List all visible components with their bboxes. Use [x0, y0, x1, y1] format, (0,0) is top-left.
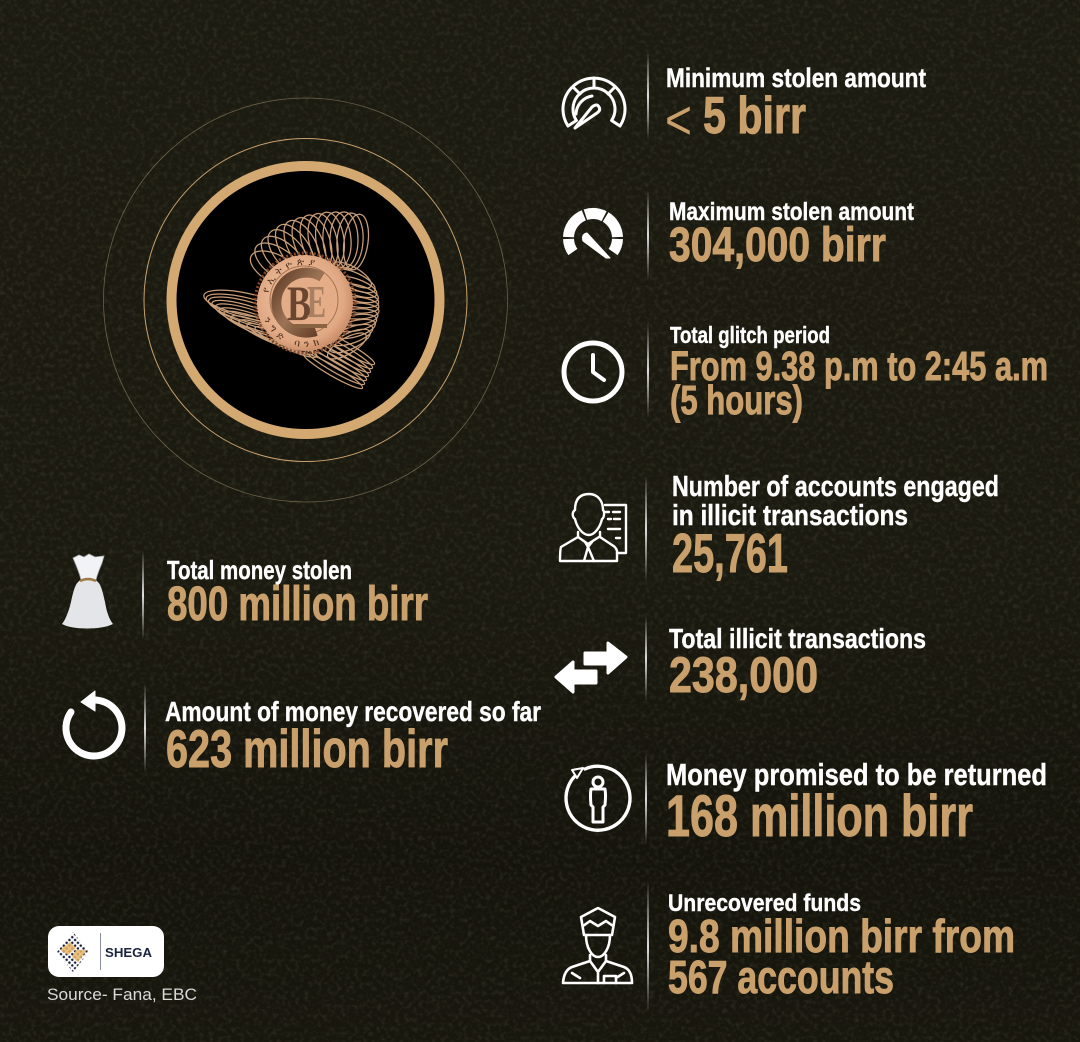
- Shega logo badge: SHEGA: [105, 945, 153, 960]
- value: 168 million birr: [666, 784, 973, 849]
- label: Total money stolen: [167, 555, 352, 585]
- stat: minimum stolen amount: [563, 52, 926, 151]
- value line 2: (5 hours): [670, 377, 803, 423]
- stat: money promised to be returned: [566, 753, 1047, 849]
- label: Total illicit transactions: [669, 623, 926, 654]
- icon: person in return circle: [566, 766, 630, 830]
- coin: የኢትዮጵያ: [264, 259, 315, 292]
- stat: maximum stolen amount: [568, 190, 915, 280]
- label line 2: in illicit transactions: [672, 500, 908, 532]
- logo medallion: [103, 98, 508, 502]
- wire spiral: right wing: [324, 257, 380, 364]
- icon: outline gauge: [563, 78, 625, 128]
- coin: ንግድ ባንክ: [264, 317, 320, 347]
- value: 238,000: [669, 647, 818, 703]
- label: Minimum stolen amount: [666, 63, 926, 93]
- wire spiral: left wing: [202, 285, 319, 362]
- icon: clock: [564, 343, 622, 401]
- value: 304,000 birr: [669, 219, 886, 272]
- stat: money recovered: [66, 683, 541, 779]
- stat: total illicit transactions: [556, 615, 926, 703]
- Shega logo badge: [48, 926, 164, 977]
- label: Maximum stolen amount: [669, 198, 915, 226]
- label: Amount of money recovered so far: [165, 696, 541, 727]
- coin: [254, 252, 356, 354]
- label line 1: Number of accounts engaged: [672, 471, 999, 503]
- less-than sign and value: 5 birr: [703, 87, 806, 145]
- icon: person with document: [560, 494, 626, 561]
- value line 2: 567 accounts: [668, 951, 894, 1003]
- icon: exchange arrows: [556, 643, 626, 692]
- icon: recovery arrow: [66, 691, 122, 756]
- wire spiral: upper wing: [245, 210, 372, 295]
- label: Unrecovered funds: [668, 890, 861, 917]
- coin: E: [307, 276, 326, 327]
- icon: police officer: [563, 908, 632, 983]
- label: Total glitch period: [670, 322, 830, 348]
- stat: total glitch period: [564, 322, 1048, 423]
- wire spiral: lower right wing: [301, 326, 377, 392]
- coin: B: [287, 275, 311, 331]
- stat: unrecovered funds: [563, 880, 1015, 1013]
- stat: accounts engaged: [560, 471, 999, 584]
- less-than sign and value: <: [665, 88, 692, 151]
- value: 25,761: [672, 522, 788, 584]
- stat: total money stolen: [62, 550, 428, 640]
- icon: money bag: [62, 554, 113, 628]
- icon: solid gauge: [568, 214, 618, 258]
- less-than sign and value: [665, 87, 806, 151]
- source note: Source- Fana, EBC: [47, 986, 197, 1004]
- value: 623 million birr: [166, 720, 448, 779]
- value: 800 million birr: [167, 578, 428, 631]
